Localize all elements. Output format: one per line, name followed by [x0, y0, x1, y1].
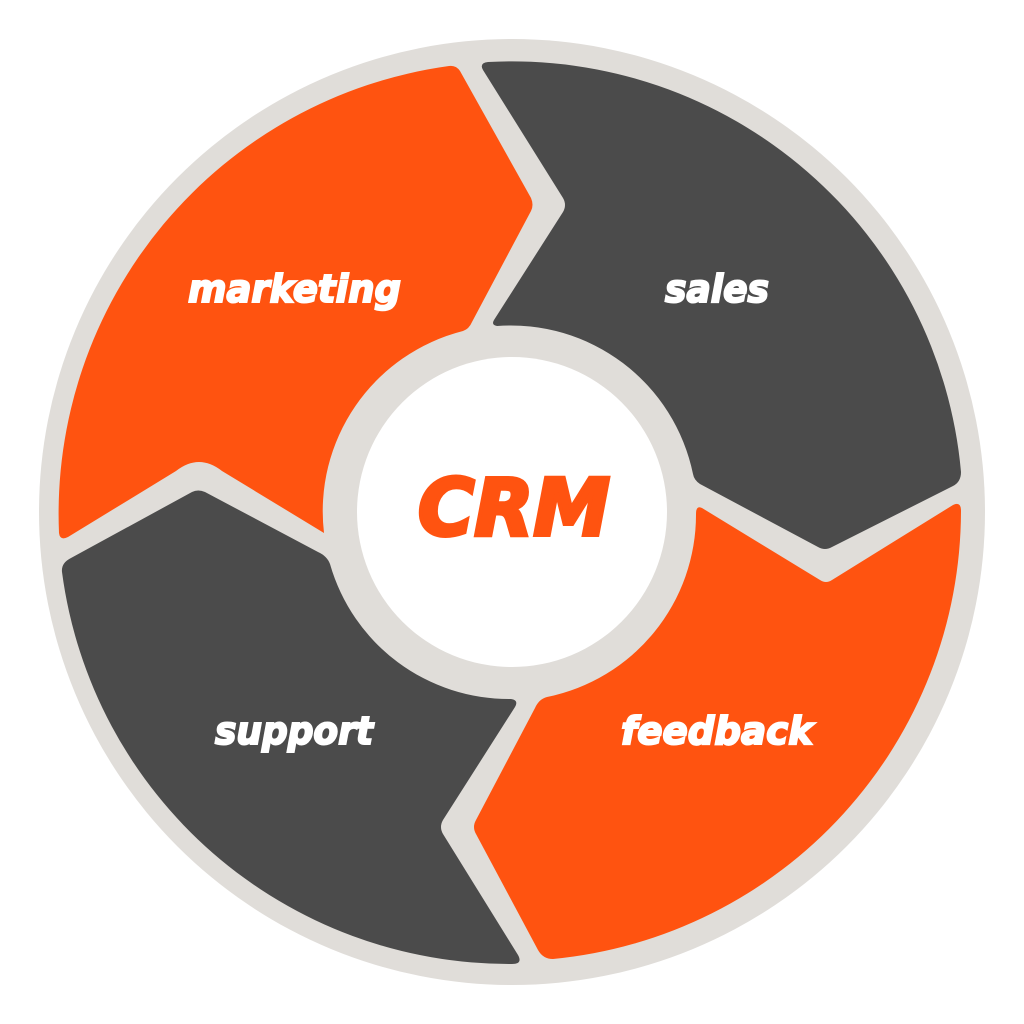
segment: sales — [482, 61, 961, 549]
center label: CRM: CRM — [418, 464, 610, 554]
segment: marketing — [59, 66, 532, 538]
center circle — [357, 357, 667, 667]
segment: support — [62, 490, 520, 964]
label: sales: sales — [665, 267, 769, 311]
label: support: support — [215, 709, 375, 753]
segment: feedback — [474, 504, 961, 959]
label: feedback: feedback — [621, 709, 816, 753]
label: marketing: marketing — [188, 267, 401, 311]
